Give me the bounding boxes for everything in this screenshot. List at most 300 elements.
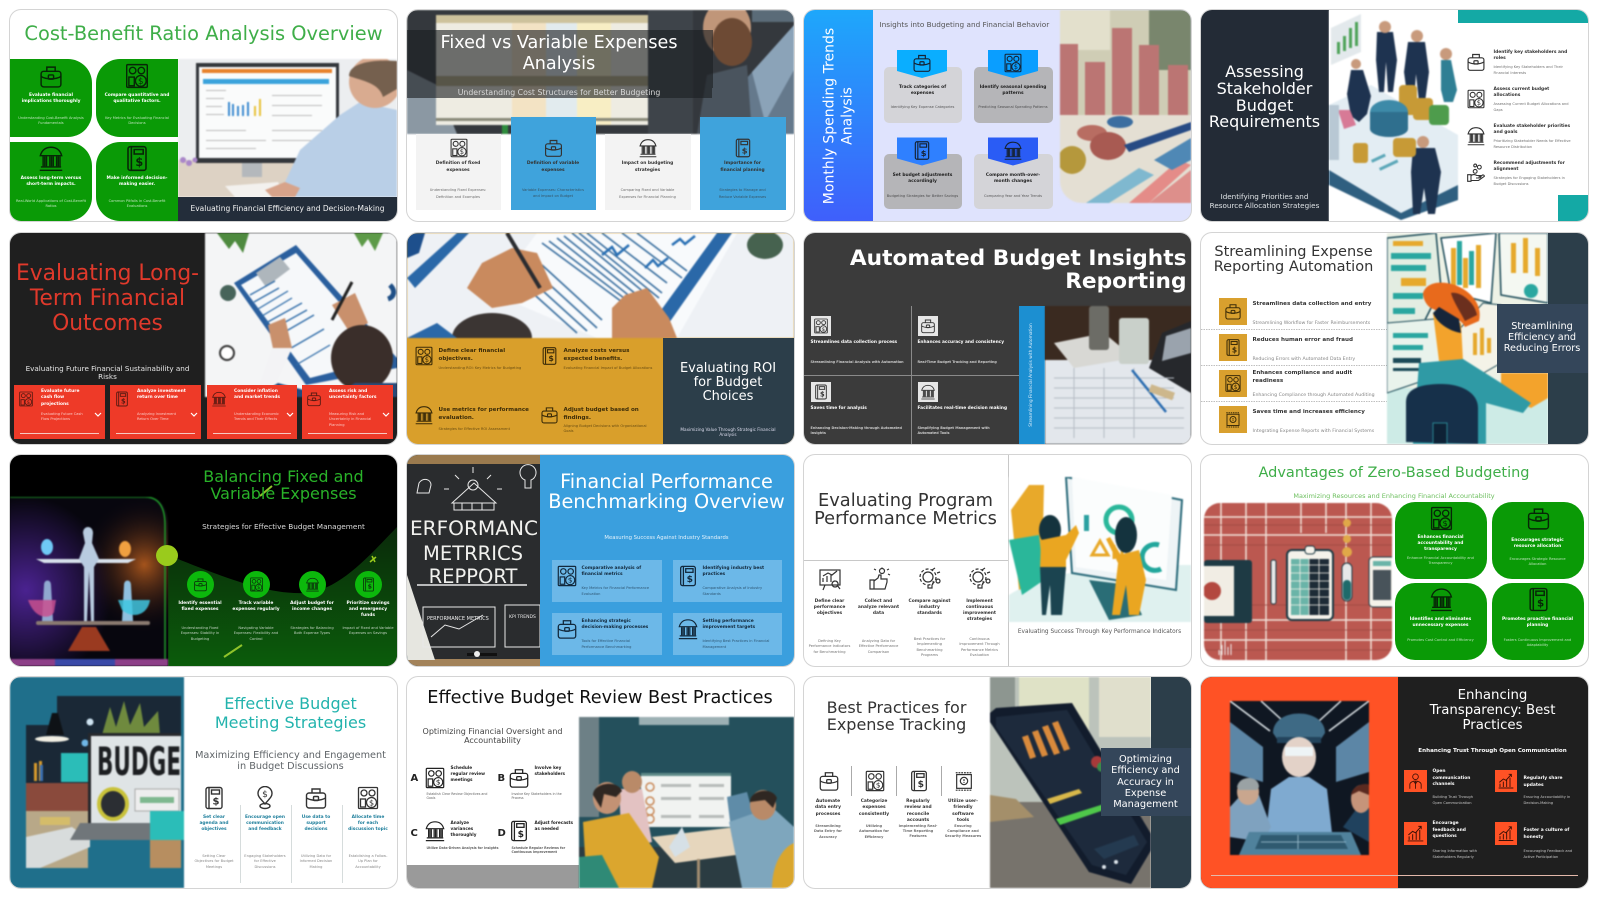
label: Analyze costs versus — [564, 348, 629, 354]
title: Evaluating Program — [818, 490, 993, 511]
label: honesty — [1524, 835, 1543, 840]
description: Benchmarking — [916, 648, 943, 652]
description: Reduce Variable Expenses — [719, 194, 766, 198]
title: Term Financial — [30, 286, 185, 310]
callout box: Management — [1113, 799, 1178, 810]
label — [856, 599, 902, 617]
title: Evaluating ROI — [680, 360, 776, 376]
subtitle: Maximizing Value Through Strategic Financial — [680, 426, 776, 432]
column: allocate time — [344, 786, 392, 881]
icon: briefcase — [545, 140, 562, 157]
description: Up Plan for — [358, 859, 378, 863]
icon tab — [897, 138, 947, 166]
subtitle: Enhancing Trust Through Open Communication — [1418, 748, 1567, 754]
column: continuous improvement — [956, 567, 1002, 663]
description — [190, 854, 238, 870]
column: open communication — [241, 786, 289, 881]
description — [344, 854, 392, 870]
label: Enhances financial — [1417, 535, 1464, 540]
title — [1200, 244, 1386, 276]
label: industry — [919, 605, 940, 610]
label: accounts — [907, 818, 929, 823]
description: Resource Distribution — [1494, 145, 1532, 149]
label: objectives — [817, 611, 842, 616]
icon — [18, 388, 34, 408]
title: Reporting Automation — [1214, 259, 1373, 275]
label: friendly — [953, 805, 973, 810]
label — [942, 799, 984, 824]
label: agenda and — [199, 821, 229, 826]
description: Key Metrics for Financial Performance — [582, 586, 649, 590]
letter: C — [410, 828, 418, 839]
label: Identify seasonal spending — [980, 85, 1046, 90]
description: Establish Clear Review Objectives and — [426, 792, 487, 796]
label — [527, 160, 579, 173]
panel: Fixed vs Variable Expenses Analysis — [406, 10, 794, 221]
icon tab — [988, 138, 1038, 166]
label — [702, 566, 764, 578]
label — [438, 406, 529, 422]
icon circle — [187, 571, 214, 598]
description — [234, 412, 279, 422]
item: priorities and goals — [1464, 124, 1584, 152]
label — [137, 388, 186, 402]
caption: Evaluating Success Through Key Performance Indicators — [1018, 629, 1181, 635]
item: financial objectives — [414, 346, 536, 374]
description: Continuous Improvement — [512, 850, 557, 854]
description: Aligning Budget Decisions with Organizational — [564, 424, 647, 428]
title — [850, 246, 1186, 292]
subtitle: Maximizing Efficiency and Engagement — [195, 750, 386, 761]
description: Simplifying Budget Management with — [918, 426, 990, 430]
grid divider: horizontal — [804, 374, 1018, 376]
description: Open Communication — [1432, 801, 1472, 805]
title — [540, 472, 794, 512]
label — [20, 176, 82, 187]
right band — [1150, 677, 1190, 888]
label: Evaluate financial — [29, 93, 73, 98]
label — [582, 566, 641, 578]
tile: proactive planning — [1492, 583, 1584, 660]
description: Analyzing Investment — [137, 412, 176, 416]
column: variable expenses — [510, 117, 596, 210]
label — [438, 346, 505, 362]
label: Adjust forecasts — [534, 820, 573, 825]
title: Requirements — [1209, 112, 1320, 131]
label: data — [873, 611, 884, 616]
icon: book — [127, 146, 147, 172]
description: Evaluating Future Cash — [41, 412, 83, 416]
label: expenses — [541, 168, 565, 173]
description: Management — [702, 645, 726, 649]
label: transparency — [1424, 547, 1457, 552]
icon — [356, 786, 380, 810]
label: month changes — [994, 179, 1032, 184]
green wave background — [10, 455, 397, 666]
label: Regularly share — [1524, 776, 1563, 781]
callout box: Accuracy in — [1117, 777, 1174, 788]
label — [106, 176, 168, 187]
description: Time Reporting — [903, 829, 933, 833]
description: Allocation — [1529, 562, 1546, 566]
icon — [1524, 587, 1552, 612]
description: Utilize Data-Driven Analysis for Insights — [426, 846, 498, 850]
panel: Effective Budget Review Best Practices — [406, 677, 794, 888]
panel: Effective Budget Meeting Strategies — [10, 677, 397, 888]
right band — [1548, 232, 1588, 444]
description — [329, 412, 371, 428]
title: Practices — [1462, 718, 1523, 733]
label: thoroughly — [450, 832, 476, 837]
label: for each — [358, 821, 378, 826]
card: strategic decision-making — [552, 613, 662, 655]
photo: hands writing on document — [406, 232, 794, 338]
divider: horizontal — [804, 560, 1008, 561]
label: Assess risk and — [329, 388, 367, 394]
title: Best Practices for — [827, 698, 966, 717]
underline — [308, 432, 387, 434]
label — [1394, 617, 1486, 629]
description — [702, 585, 762, 597]
icon tile — [810, 382, 830, 402]
card: investment return — [110, 384, 201, 438]
column: financial planning — [700, 117, 786, 210]
card: cash flow — [14, 384, 105, 438]
label — [230, 601, 282, 613]
title — [1398, 688, 1588, 733]
title: Benchmarking Overview — [548, 490, 785, 513]
label: Encourages strategic — [1511, 538, 1564, 543]
tile: resource allocation — [1492, 502, 1584, 579]
underline — [213, 432, 291, 434]
description — [522, 188, 584, 198]
column: use data — [292, 786, 340, 881]
label: Track categories of — [899, 85, 946, 90]
label: Define clear — [815, 599, 844, 604]
icon — [540, 346, 558, 366]
panel: Cost-Benefit Ratio Analysis Overview — [10, 10, 397, 221]
description: Performance Indicators — [809, 644, 850, 648]
chevron — [382, 412, 390, 416]
photo: desk with report and calculator — [1044, 306, 1190, 444]
label: Adjust budget based on — [564, 406, 639, 412]
description: Common Pitfalls in Cost-Benefit — [109, 199, 165, 203]
label: Involve key — [534, 765, 561, 770]
label: Encourage open — [245, 815, 285, 820]
label: unnecessary expenses — [1413, 623, 1468, 628]
label — [806, 599, 852, 617]
label: Streamlines data collection process — [810, 340, 897, 344]
description — [719, 188, 766, 198]
title: Effective Budget — [224, 694, 357, 713]
illustration: budget grid with calculator — [1204, 503, 1392, 660]
description: Streamlining Financial Analysis with Automation — [810, 360, 904, 364]
description: Effective Performance — [859, 644, 898, 648]
description: Schedule Regular Reviews for — [512, 846, 565, 850]
description: Flow Projections — [41, 417, 70, 421]
label — [104, 92, 170, 104]
vertical caption: Streamlining Financial Analysis with Automation — [1028, 323, 1034, 426]
underline — [116, 432, 195, 434]
teal accent: top bar — [1458, 10, 1588, 23]
label: roles — [1494, 56, 1506, 61]
item: honesty — [1494, 822, 1584, 867]
icon — [908, 770, 930, 792]
title: Variable Expenses — [210, 484, 357, 503]
label: Identify essential — [178, 601, 222, 606]
description — [174, 626, 226, 642]
title: Reporting — [1065, 268, 1186, 294]
description — [108, 199, 166, 208]
description: Engaging Stakeholders — [244, 854, 286, 858]
description: Defining Key — [818, 639, 841, 643]
chevron — [94, 412, 102, 416]
illustration: balancing figures — [10, 497, 168, 666]
label: Utilize user- — [948, 799, 978, 804]
column: fixed expenses — [416, 134, 500, 210]
description: Encourages Strategic Resource — [1509, 557, 1566, 561]
icon circle — [299, 571, 326, 598]
item C — [410, 820, 490, 853]
label: financial planning — [720, 168, 765, 173]
label: Assess current budget — [1494, 87, 1549, 92]
label: Use data to — [302, 815, 330, 820]
photo: chalkboard performance metrics report: PERFORMANCE METRICS — [426, 616, 488, 622]
label: Enhances compliance and audit — [1252, 370, 1352, 376]
chevron — [286, 412, 294, 416]
tile: evaluate financial implications — [10, 59, 92, 137]
description: Evaluation — [970, 653, 989, 657]
label: decision-making processes — [582, 625, 648, 630]
icon: money — [126, 64, 148, 88]
label: Make informed decision- — [107, 176, 167, 181]
title: Transparency: Best — [1430, 703, 1555, 718]
label: reconcile — [907, 812, 929, 817]
description: Real-Time Budget Tracking and Reporting — [918, 360, 997, 364]
label: decisions — [304, 827, 328, 832]
illustration: woman with helmet at control table — [1230, 701, 1368, 855]
icon — [1428, 506, 1454, 531]
description: Return Over Time — [137, 417, 169, 421]
vertical title: Analysis — [840, 87, 856, 144]
label: short-term impacts. — [26, 182, 76, 187]
label: projections — [41, 402, 69, 406]
column: user-friendly tools — [942, 770, 984, 860]
icon — [114, 388, 130, 408]
icon — [1524, 506, 1552, 531]
label: variances — [450, 826, 473, 831]
icon — [424, 767, 446, 789]
icon — [968, 567, 992, 591]
description — [582, 638, 631, 650]
photo: chalkboard performance metrics report: ERFORMANC — [410, 517, 538, 540]
label: objectives. — [438, 356, 473, 362]
subtitle: Analysis — [719, 432, 737, 436]
icon — [202, 786, 226, 810]
label — [1432, 821, 1466, 841]
description — [1432, 848, 1477, 861]
tile: long-term impacts — [10, 142, 92, 221]
label: Prioritize savings — [346, 601, 390, 606]
label: Compare against — [908, 599, 950, 604]
subtitle: Identifying Priorities and — [1221, 192, 1308, 201]
title: Expense Tracking — [827, 715, 966, 734]
item: costs versus benefits — [540, 346, 660, 374]
item: feedback — [1404, 822, 1492, 867]
label: Foster a culture of — [1524, 828, 1569, 833]
description — [1492, 557, 1584, 567]
subtitle — [662, 426, 794, 436]
icon: money — [450, 138, 468, 158]
column: categorize expenses — [852, 770, 896, 860]
label — [974, 173, 1052, 185]
box — [884, 67, 962, 123]
row: compliance — [1218, 370, 1384, 398]
title — [1200, 64, 1328, 131]
label: consistently — [859, 812, 889, 817]
description: Uncertainty in Financial — [329, 417, 371, 421]
item: recommend adjustments — [1464, 161, 1584, 189]
label — [344, 815, 392, 833]
description — [1494, 175, 1565, 187]
label: channels — [1432, 782, 1455, 787]
vertical title — [822, 27, 856, 204]
title: Choices — [703, 388, 753, 404]
blue stripe with vertical text — [1018, 306, 1044, 444]
icon: book — [736, 138, 750, 158]
icon — [556, 565, 578, 587]
description: Involve Key Stakeholders in the — [512, 792, 562, 796]
panel: Streamlining Expense Reporting Automation — [1200, 232, 1588, 444]
label: Impact on budgeting — [622, 161, 673, 166]
title: Assessing — [1225, 62, 1304, 81]
icon — [918, 567, 942, 591]
label — [582, 619, 648, 631]
label: accountability and — [1418, 541, 1463, 546]
description: Gaps — [1494, 108, 1503, 112]
icon tab — [897, 50, 947, 78]
label: Categorize — [861, 799, 887, 804]
description — [512, 792, 562, 800]
description: Financial Interests — [1494, 71, 1526, 75]
label — [450, 820, 476, 838]
label: patterns — [1002, 91, 1024, 96]
description: Accuracy — [819, 835, 837, 839]
icon tab — [988, 50, 1038, 78]
description: Navigating Variable — [238, 626, 274, 630]
description: Expenses for Financial Planning — [619, 194, 676, 198]
label: evaluation. — [438, 414, 474, 420]
label: Consider inflation — [234, 388, 278, 394]
label: Assess long-term versus — [21, 176, 81, 181]
title: Automated Budget Insights — [850, 246, 1186, 270]
icon — [1464, 163, 1486, 183]
description — [942, 824, 984, 839]
label: alignment — [1494, 167, 1519, 172]
label — [342, 601, 394, 619]
description: Performance Benchmarking — [582, 645, 631, 649]
icon: bank — [39, 146, 63, 171]
title — [804, 699, 990, 733]
label: Analyze — [450, 820, 469, 825]
label — [292, 815, 340, 833]
panel: Evaluating Program Performance Metrics — [804, 455, 1190, 666]
description: Goals — [426, 796, 435, 800]
description: Comparing Year and Year Trends — [984, 194, 1042, 198]
description: Identifying Best Practices in Financial — [702, 639, 769, 643]
label: funds — [361, 613, 375, 618]
label: Recommend adjustments for — [1494, 161, 1565, 166]
subtitle: Strategies for Effective Budget Management — [202, 522, 365, 531]
column: budgeting strategies — [604, 134, 690, 210]
icon: bank — [639, 139, 657, 158]
description: Utilizing Data for — [301, 854, 331, 858]
description — [619, 188, 676, 198]
panel: Automated Budget Insights Reporting — [804, 232, 1190, 444]
label: income changes — [292, 607, 332, 612]
label — [898, 84, 946, 96]
description — [430, 188, 486, 198]
label — [1492, 617, 1584, 629]
description: Building Trust Through — [1432, 795, 1473, 799]
icon — [508, 820, 530, 842]
tile: informed decisions — [96, 142, 178, 221]
description: Comparative Analysis of Industry — [702, 586, 762, 590]
description: Analyzing Data for — [862, 639, 895, 643]
subtitle — [10, 364, 205, 380]
label — [564, 346, 629, 362]
description: Ratios — [45, 204, 57, 208]
icon — [676, 618, 698, 640]
description: Strategies for Balancing — [290, 626, 334, 630]
label: discussion topic — [348, 827, 388, 832]
caption bar — [178, 197, 397, 221]
divider line — [1210, 875, 1578, 876]
label: continuous — [966, 605, 993, 610]
item: current allocations — [1464, 87, 1584, 115]
description: Comparing Fixed and Variable — [621, 188, 674, 192]
subtitle: Maximizing Resources and Enhancing Financial Accountability — [1293, 492, 1495, 500]
label: tools — [957, 818, 969, 823]
label: Streamlines data collection and entry — [1252, 300, 1371, 306]
description — [956, 637, 1002, 658]
panel: Evaluating Long-Term Financial Outcomes — [10, 232, 397, 444]
label — [1524, 828, 1569, 841]
label: allocations — [1494, 93, 1520, 98]
description — [1432, 794, 1473, 807]
label — [1494, 124, 1570, 136]
label: improvement targets — [702, 625, 755, 630]
vertical title: Monthly Spending Trends — [822, 27, 838, 204]
icon — [1464, 52, 1486, 72]
icon circle — [355, 571, 382, 598]
orange left band — [1200, 677, 1398, 888]
description — [918, 426, 990, 436]
description: Measuring Risk and — [329, 412, 364, 416]
panel: Monthly Spending Trends Analysis — [804, 10, 1190, 221]
title: Streamlining Expense — [1214, 244, 1373, 260]
description: Security Measures — [945, 834, 981, 838]
card: comparative analysis — [552, 560, 662, 602]
callout box — [1100, 748, 1190, 816]
title: Outcomes — [52, 310, 163, 336]
description: Streamlining — [815, 824, 841, 828]
icon — [508, 767, 530, 789]
description: Data Entry for — [814, 829, 842, 833]
teal accent: corner block — [1558, 195, 1588, 221]
illustration: women analyzing dashboard — [1008, 477, 1190, 622]
icon — [540, 404, 558, 424]
